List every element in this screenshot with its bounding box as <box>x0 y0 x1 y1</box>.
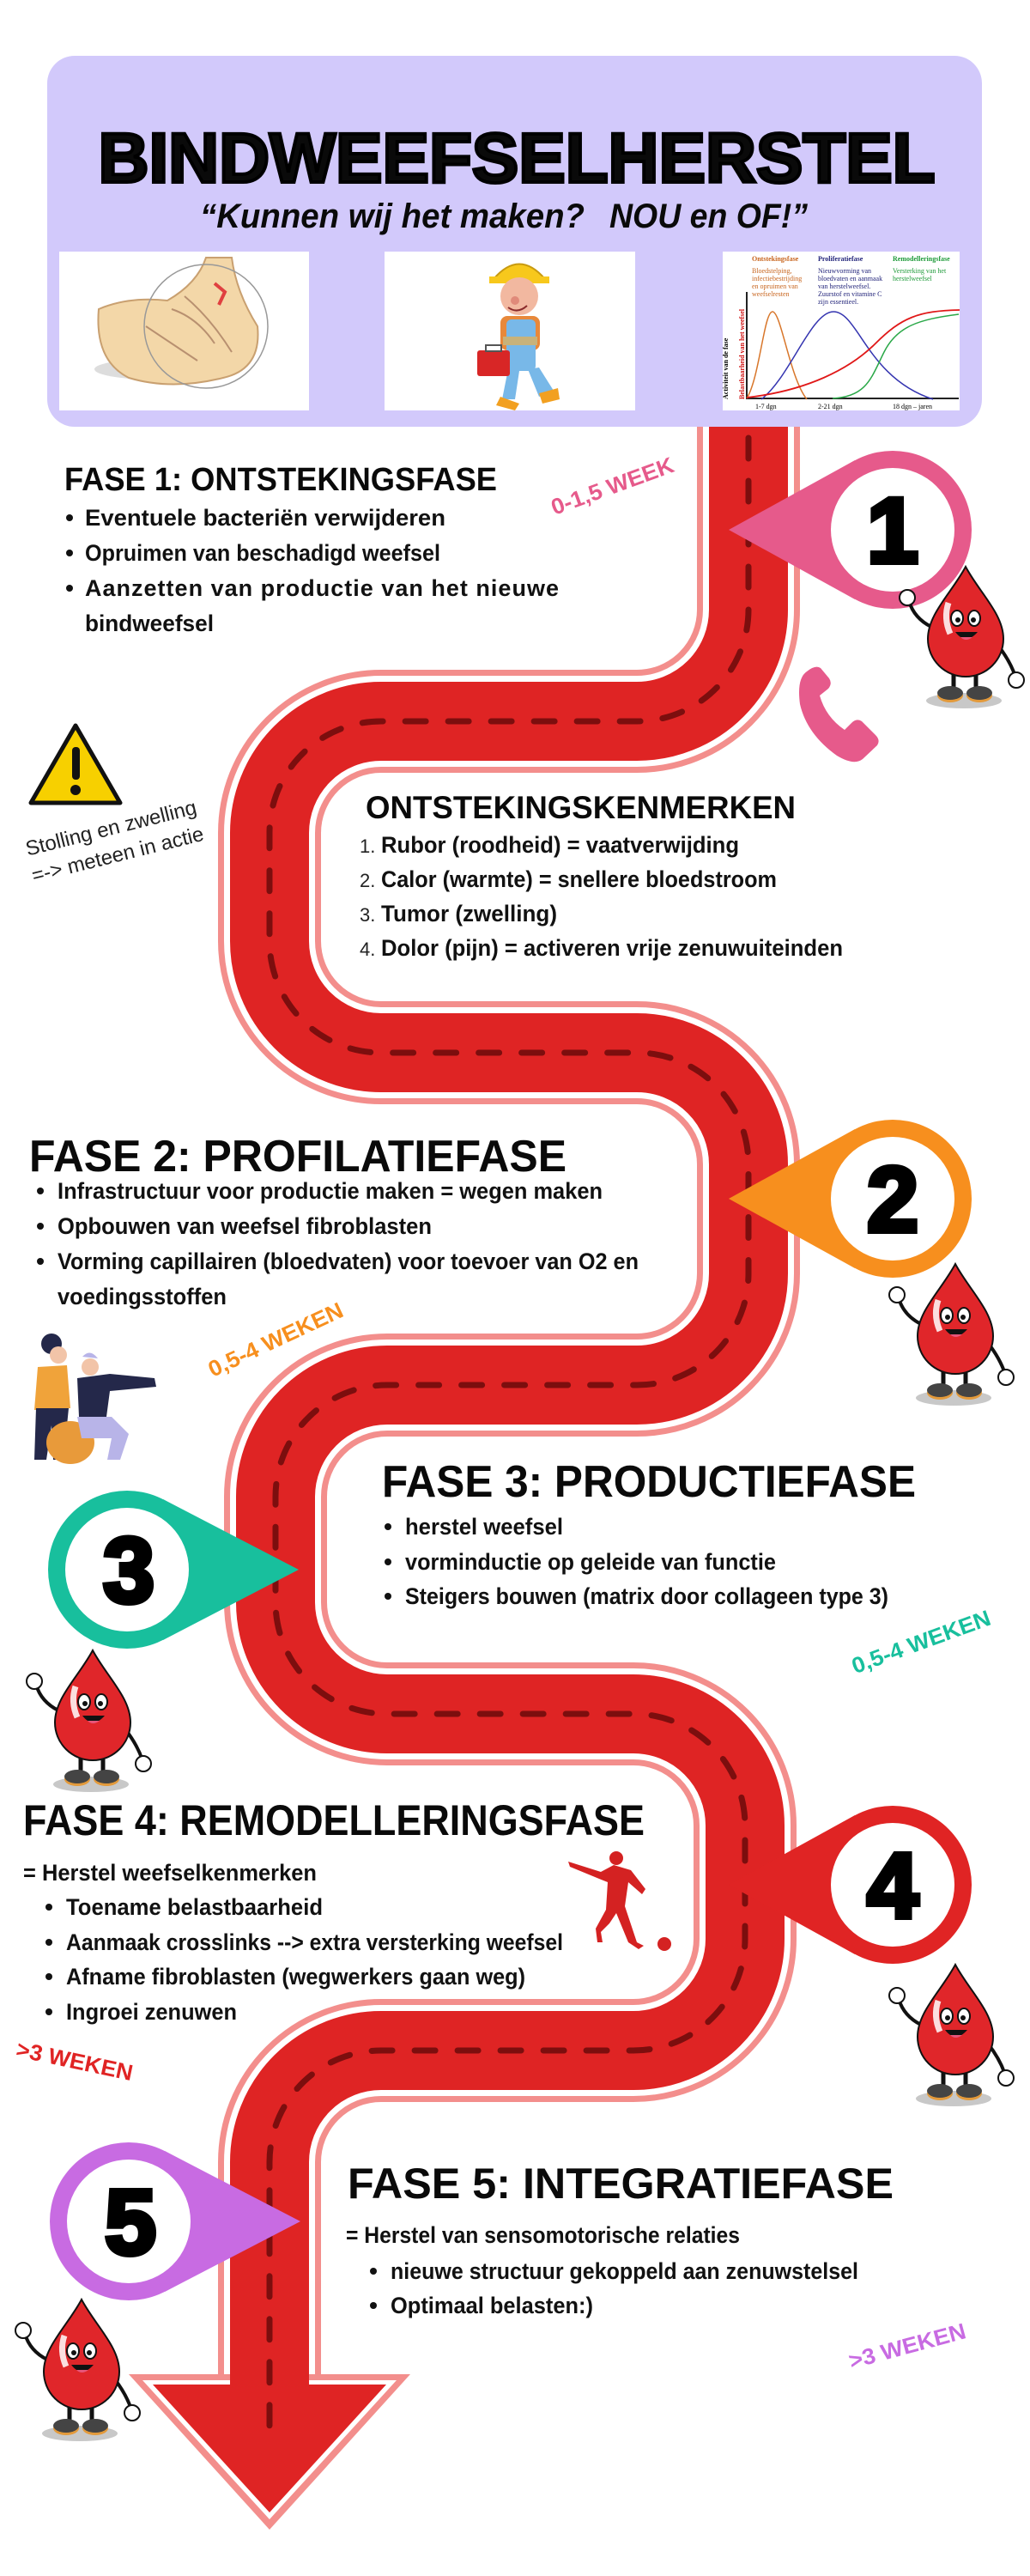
ontstekingskenmerken block: Dolor (pijn) = activeren vrije zenuwuiteinden <box>381 935 843 961</box>
image: phase chart: Nieuwvorming van <box>818 267 871 275</box>
fase 4 text block <box>23 1796 645 2025</box>
drop character 4 <box>889 1965 1014 2106</box>
image: phase chart: zijn essentieel. <box>818 298 858 306</box>
fase 3 text block <box>382 1457 916 1609</box>
tag: 0,5-4 weken orange: 0,5-4 WEKEN <box>204 1297 347 1382</box>
fase 4 text block: Ingroei zenuwen <box>66 1999 237 2025</box>
tag: >3 weken red: >3 WEKEN <box>14 2036 136 2086</box>
image: phase chart: infectiebestrijding <box>752 275 802 283</box>
image: phase chart: van herstelweefsel. <box>818 283 870 290</box>
fase 2 text block: voedingsstoffen <box>58 1284 227 1309</box>
fase 5 text block: nieuwe structuur gekoppeld aan zenuwstelsel <box>391 2258 858 2284</box>
drop character 2 <box>889 1264 1014 1406</box>
subtitle: “Kunnen wij het maken? <box>200 197 585 235</box>
image: phase chart: Bloedstelping, <box>752 267 791 275</box>
ontstekingskenmerken block: Rubor (roodheid) = vaatverwijding <box>381 832 739 858</box>
ontstekingskenmerken block: 1. <box>360 835 375 857</box>
fase 4 text block: Toename belastbaarheid <box>66 1894 323 1920</box>
pin 1: 1 <box>867 478 918 582</box>
illustration: therapist with patient <box>34 1334 156 1464</box>
fase 3 text block: FASE 3: PRODUCTIEFASE <box>382 1457 916 1507</box>
fase 5 text block: FASE 5: INTEGRATIEFASE <box>348 2160 894 2208</box>
pin 3: 3 <box>103 1518 154 1622</box>
image: phase chart: 1-7 dgn <box>755 403 777 410</box>
ontstekingskenmerken block: 3. <box>360 904 375 926</box>
fase 2 text block: FASE 2: PROFILATIEFASE <box>29 1132 566 1182</box>
drop character 1 <box>900 567 1024 708</box>
fase 5 text block: Optimaal belasten:) <box>391 2293 593 2318</box>
title: BINDWEEFSELHERSTEL <box>98 119 936 197</box>
subtitle: NOU en OF!” <box>609 197 808 235</box>
fase 2 text block: Vorming capillairen (bloedvaten) voor toevoer van O2 en <box>58 1249 639 1274</box>
drop character 5 <box>15 2300 140 2441</box>
road <box>129 427 748 2530</box>
fase 2 text block <box>29 1132 639 1309</box>
arrow head <box>129 2353 410 2530</box>
image: foot anatomy <box>59 252 309 410</box>
note: stolling en zwelling <box>23 796 206 888</box>
fase 4 text block: Afname fibroblasten (wegwerkers gaan weg) <box>66 1964 525 1990</box>
ontstekingskenmerken block: Calor (warmte) = snellere bloedstroom <box>381 866 777 892</box>
fase 1 text block: Eventuele bacteriën verwijderen <box>85 505 445 531</box>
header panel <box>47 56 982 427</box>
fase 4 text block: Aanmaak crosslinks --> extra versterking weefsel <box>66 1929 563 1955</box>
tag: >3 weken purple: >3 WEKEN <box>846 2318 968 2374</box>
fase 3 text block: vorminductie op geleide van functie <box>405 1549 776 1575</box>
image: phase chart: Zuurstof en vitamine C <box>818 290 882 298</box>
icon: warning <box>31 726 120 803</box>
image: phase chart: bloedvaten en aanmaak <box>818 275 882 283</box>
ontstekingskenmerken block: 2. <box>360 870 375 891</box>
pin 2: 2 <box>867 1147 918 1251</box>
fase 1 text block: Opruimen van beschadigd weefsel <box>85 540 440 566</box>
pin 1 <box>729 451 972 609</box>
subtitle <box>200 197 808 235</box>
image: phase chart: Proliferatiefase <box>818 255 863 263</box>
fase 2 text block: Opbouwen van weefsel fibroblasten <box>58 1213 432 1239</box>
ontstekingskenmerken block: ONTSTEKINGSKENMERKEN <box>366 790 796 825</box>
drop character 3 <box>27 1650 151 1792</box>
fase 2 text block: Infrastructuur voor productie maken = wegen maken <box>58 1178 603 1204</box>
pin 2 <box>729 1120 972 1278</box>
fase 3 text block: herstel weefsel <box>405 1514 563 1540</box>
image: phase chart: Activiteit van de fase <box>722 337 730 399</box>
fase 3 text block: Steigers bouwen (matrix door collageen type 3) <box>405 1583 888 1609</box>
image: phase chart: herstelweefsel <box>893 275 933 283</box>
note: stolling en zwelling: Stolling en zwelling <box>23 796 199 861</box>
pin 4 <box>729 1806 972 1964</box>
fase 1 text block <box>64 462 559 636</box>
fase 1 text block: Aanzetten van productie van het nieuwe <box>85 575 559 601</box>
ontstekingskenmerken block <box>360 790 843 961</box>
fase 4 text block: FASE 4: REMODELLERINGSFASE <box>23 1796 645 1844</box>
ontstekingskenmerken block: Tumor (zwelling) <box>381 901 557 927</box>
pin 5 <box>50 2142 300 2300</box>
image: phase chart: 2-21 dgn <box>818 403 843 410</box>
icon: soccer player <box>568 1851 671 1951</box>
image: phase chart: Belastbaarheid van het weefsel <box>738 308 746 399</box>
image: phase chart: weefselresten <box>752 290 790 298</box>
image: phase chart: Versterking van het <box>893 267 947 275</box>
fase 4 text block: = Herstel weefselkenmerken <box>23 1860 317 1886</box>
image: phase chart: Remodelleringsfase <box>893 255 950 263</box>
image: phase chart: 18 dgn – jaren <box>893 403 932 410</box>
image: phase chart: Ontstekingsfase <box>752 255 799 263</box>
image: builder <box>385 252 635 410</box>
fase 5 text block: = Herstel van sensomotorische relaties <box>346 2222 740 2248</box>
note: stolling en zwelling: =-> meteen in actie <box>29 823 206 888</box>
image: phase chart: en opruimen van <box>752 283 798 290</box>
pin 4: 4 <box>867 1833 918 1937</box>
icon: phone <box>799 667 879 762</box>
image: phase chart <box>722 252 960 410</box>
pin 5: 5 <box>105 2170 156 2274</box>
fase 1 text block: FASE 1: ONTSTEKINGSFASE <box>64 462 497 498</box>
fase 1 text block: bindweefsel <box>85 611 214 636</box>
pin 3 <box>48 1491 299 1649</box>
ontstekingskenmerken block: 4. <box>360 939 375 960</box>
tag: 0,5-4 weken teal: 0,5-4 WEKEN <box>848 1605 994 1679</box>
tag: 0-1,5 week: 0-1,5 WEEK <box>548 452 677 520</box>
fase 5 text block <box>346 2160 894 2318</box>
